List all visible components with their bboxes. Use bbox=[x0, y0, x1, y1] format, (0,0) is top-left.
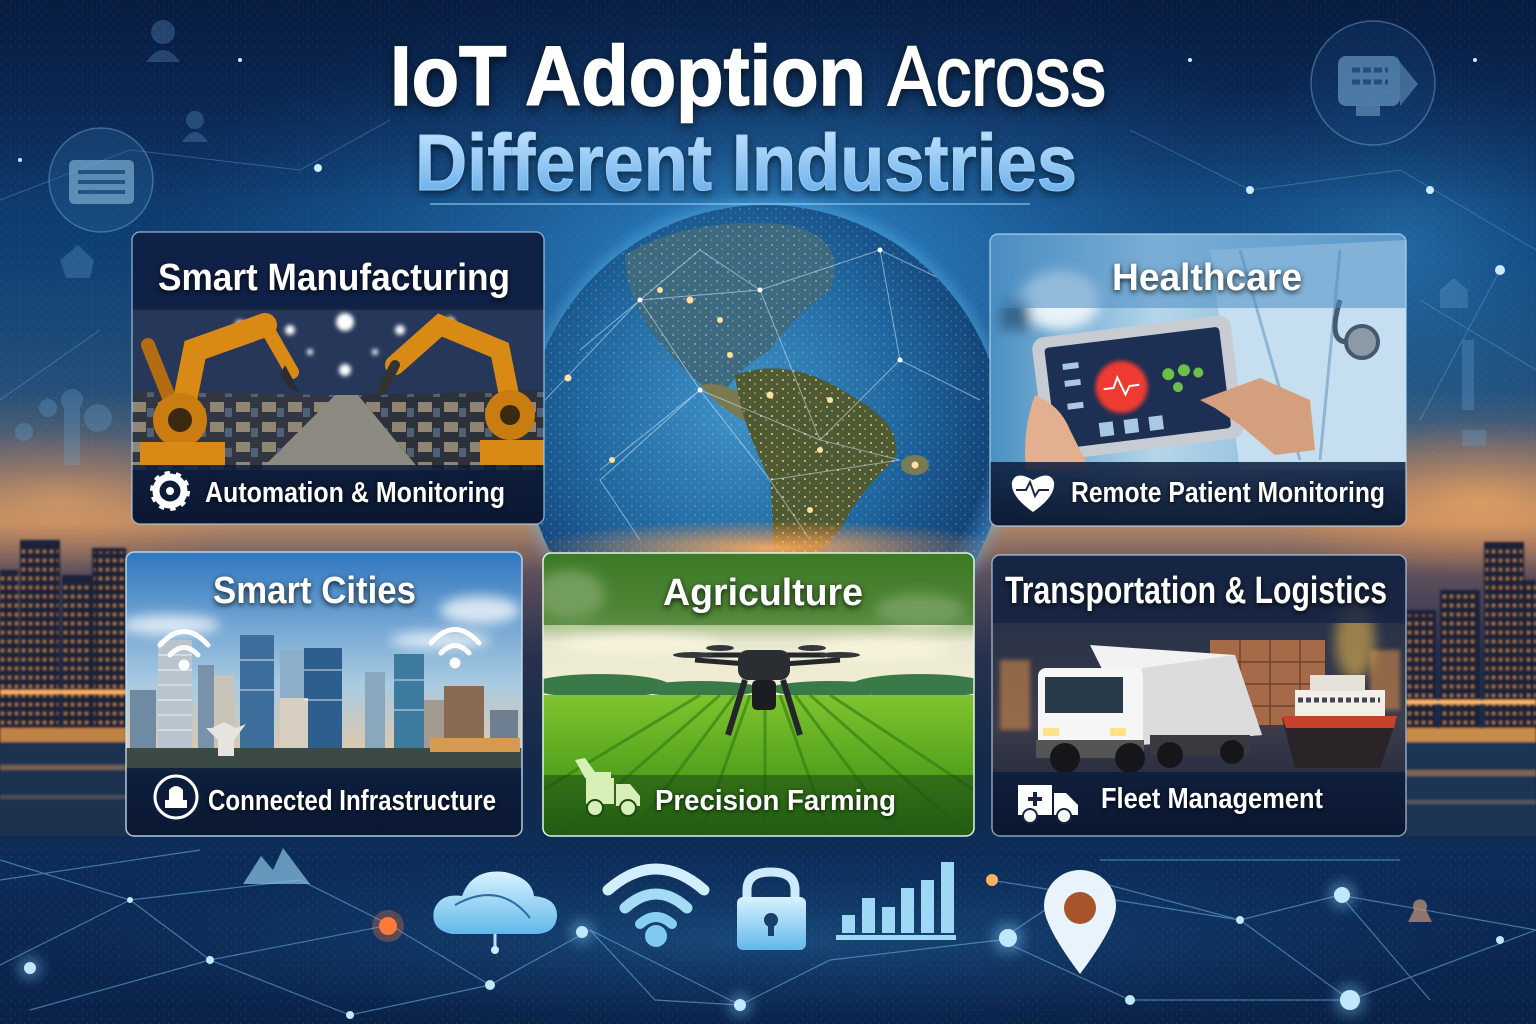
icon: bar chart bbox=[836, 862, 956, 940]
panel: healthcare bbox=[990, 234, 1406, 526]
doctor coat bbox=[1210, 240, 1406, 470]
panel: smart manufacturing bbox=[132, 232, 544, 524]
bottom network bbox=[0, 850, 1536, 1019]
icon: cloud bbox=[433, 872, 557, 954]
title line 1: IoT Adoption bbox=[390, 29, 866, 123]
icon: wifi left bbox=[160, 632, 208, 668]
drone bbox=[673, 645, 860, 735]
globe bbox=[526, 196, 1003, 584]
continent: central america bbox=[700, 384, 746, 422]
title line 1: Across bbox=[888, 29, 1106, 123]
heading: Smart Cities bbox=[213, 570, 416, 612]
icon: person bbox=[1408, 899, 1432, 922]
ship bbox=[1282, 675, 1397, 768]
truck bbox=[1036, 645, 1262, 773]
icon: mountain bbox=[243, 848, 310, 884]
label: Connected Infrastructure bbox=[208, 785, 496, 817]
icon: location pin bbox=[1044, 870, 1116, 974]
icon: device badge bbox=[1311, 21, 1435, 145]
icon: infrastructure bbox=[155, 776, 197, 818]
heading: Smart Manufacturing bbox=[158, 257, 510, 299]
city skyline right bbox=[1406, 542, 1536, 836]
heading: Agriculture bbox=[663, 572, 863, 614]
title line 2: Different Industries bbox=[415, 118, 1077, 207]
icon: document badge bbox=[49, 128, 153, 232]
icon: farm truck bbox=[575, 758, 640, 816]
tablet bbox=[1031, 314, 1245, 462]
stethoscope bbox=[1332, 299, 1344, 344]
icon: wifi bbox=[608, 869, 704, 947]
factory scene bbox=[132, 310, 544, 470]
icon: delivery truck bbox=[1018, 785, 1078, 823]
label: Remote Patient Monitoring bbox=[1071, 477, 1385, 509]
skyline bbox=[130, 635, 518, 750]
panel: agriculture bbox=[530, 553, 990, 836]
title bbox=[390, 29, 1106, 207]
containers bbox=[1210, 640, 1325, 725]
continent: north america bbox=[625, 223, 835, 400]
heading: Transportation & Logistics bbox=[1005, 570, 1387, 612]
label: Fleet Management bbox=[1101, 783, 1323, 815]
icon: lock bbox=[737, 872, 806, 950]
continent: south america bbox=[735, 368, 896, 552]
robot arm right bbox=[377, 313, 518, 395]
icon: wifi right bbox=[431, 630, 479, 666]
label: Precision Farming bbox=[655, 785, 896, 817]
label: Automation & Monitoring bbox=[205, 477, 505, 509]
panel: smart cities bbox=[120, 552, 522, 836]
hands bbox=[1025, 395, 1090, 470]
heading: Healthcare bbox=[1112, 257, 1302, 299]
icon: gear bbox=[153, 474, 187, 508]
city skyline left bbox=[0, 540, 126, 836]
background network and faint icons bbox=[0, 20, 1536, 465]
robot arm left bbox=[148, 325, 292, 425]
panel: transportation and logistics bbox=[992, 555, 1406, 836]
icon: heart pulse bbox=[1012, 475, 1054, 512]
